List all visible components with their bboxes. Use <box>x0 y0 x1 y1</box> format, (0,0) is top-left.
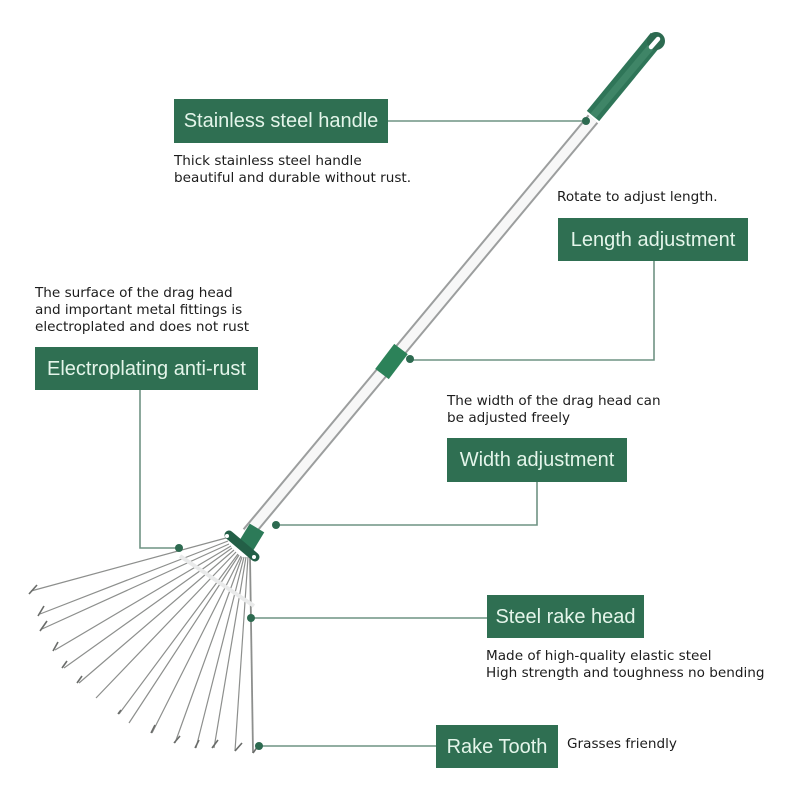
text: width description <box>446 393 661 426</box>
text: rake head description: Made of high-quality elastic steel <box>486 648 712 664</box>
label: width adjustment <box>447 438 627 482</box>
label: electroplating anti-rust <box>35 347 258 390</box>
label: steel rake head: Steel rake head <box>495 606 636 628</box>
text: handle description <box>174 153 411 186</box>
label: width adjustment: Width adjustment <box>460 449 614 471</box>
leader dots <box>175 117 590 750</box>
label: length adjustment <box>558 218 748 261</box>
text: electroplating description <box>34 285 249 335</box>
text: electroplating description: and important metal fittings is <box>35 302 242 318</box>
text: electroplating description: electroplated and does not rust <box>35 319 249 335</box>
label: length adjustment: Length adjustment <box>571 228 735 250</box>
text: width description: The width of the drag head can <box>447 393 661 409</box>
label: stainless steel handle <box>174 99 388 143</box>
length adjustment collar <box>382 349 401 374</box>
text: length description: Rotate to adjust length. <box>557 189 718 205</box>
green grip handle <box>593 32 665 116</box>
rake teeth <box>29 538 258 753</box>
text: rake head description <box>486 648 765 681</box>
text: handle description: beautiful and durable without rust. <box>174 170 411 186</box>
text: rake tooth description: Grasses friendly <box>567 736 677 752</box>
rake cross bar <box>180 556 254 606</box>
text: electroplating description: The surface of the drag head <box>35 285 233 301</box>
stainless steel shaft <box>248 119 593 533</box>
label: rake tooth <box>436 725 558 768</box>
label: rake tooth: Rake Tooth <box>447 736 547 758</box>
text: handle description: Thick stainless steel handle <box>174 153 362 169</box>
text: rake head description: High strength and toughness no bending <box>486 665 765 681</box>
label: electroplating anti-rust: Electroplating anti-rust <box>47 358 246 380</box>
label: stainless steel handle: Stainless steel handle <box>184 110 378 132</box>
text: width description: be adjusted freely <box>447 410 570 426</box>
rake head bracket <box>225 528 257 559</box>
label: steel rake head <box>487 595 644 638</box>
leader lines <box>140 121 654 746</box>
